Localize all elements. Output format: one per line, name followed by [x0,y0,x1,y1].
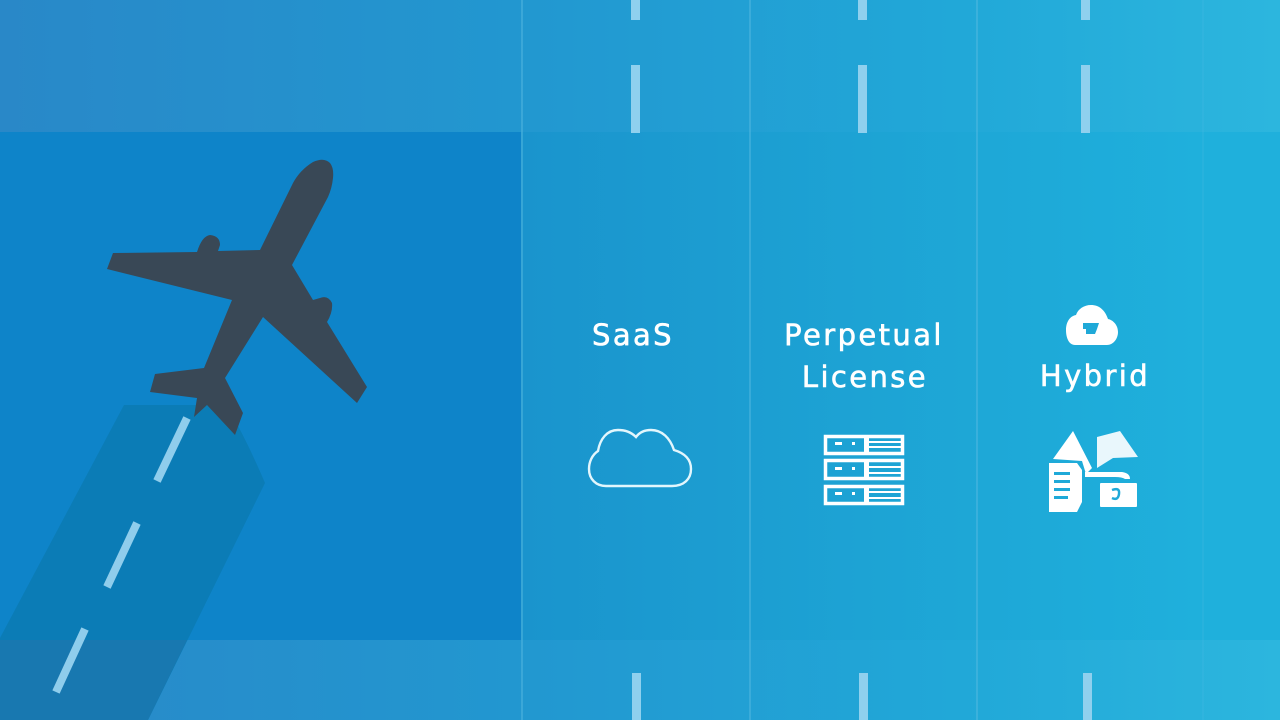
icon: solid cloud [1066,305,1118,345]
panel: left sky [0,132,521,640]
heading: SaaS: SaaS [592,318,674,352]
column: SaaS [589,318,691,486]
runway dashes [56,418,187,692]
column: Perpetual License [784,318,944,505]
angled runway [0,405,265,720]
runway lane markings [631,0,1092,720]
icon: cloud outline [589,430,691,486]
icon: airplane silhouette [107,160,367,435]
heading: Hybrid: Hybrid [1040,359,1150,393]
column: Hybrid [1040,305,1150,512]
heading: Perpetual License: License [802,360,928,394]
icon: hybrid buildings and storage [1049,431,1138,512]
column dividers [521,0,1204,720]
icon: server rack [826,435,902,505]
heading: Perpetual License: Perpetual [784,318,944,352]
